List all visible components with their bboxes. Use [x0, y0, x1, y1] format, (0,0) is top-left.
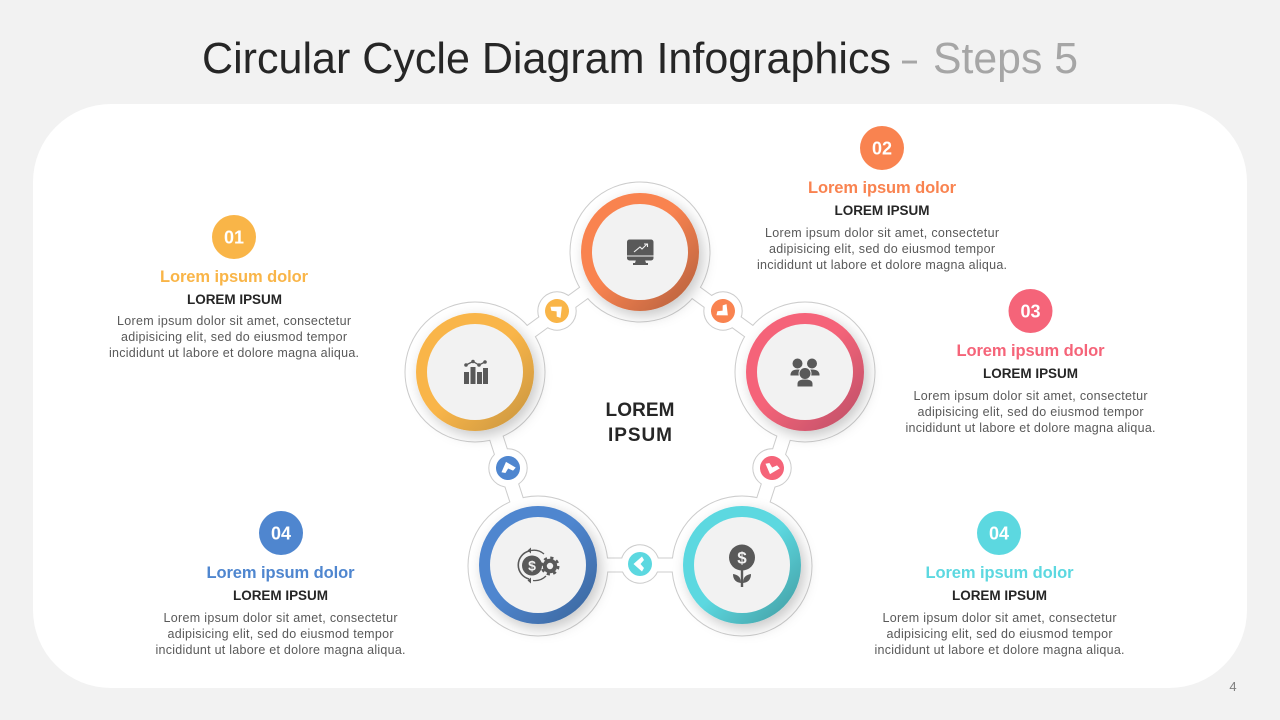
- body 04 left: incididunt ut labore et dolore magna aliqua.: [156, 643, 406, 657]
- body 01: Lorem ipsum dolor sit amet, consectetur: [117, 314, 351, 328]
- icon: monitor: [627, 240, 654, 265]
- badge 04 left: [259, 511, 303, 555]
- ring: step 3 pink: [746, 313, 864, 431]
- body 02: incididunt ut labore et dolore magna aliqua.: [757, 258, 1007, 272]
- ring: step 1 yellow: [416, 313, 534, 431]
- badge 02: 02: [872, 138, 892, 158]
- arrow: orange: [706, 294, 740, 328]
- body 02: Lorem ipsum dolor sit amet, consectetur: [765, 226, 999, 240]
- subheading 03: LOREM IPSUM: [983, 366, 1078, 381]
- text block: step 02: [757, 126, 1007, 272]
- heading 04 right: Lorem ipsum dolor: [926, 564, 1074, 582]
- icon: money plant: $: [737, 548, 747, 568]
- heading 03: Lorem ipsum dolor: [956, 342, 1105, 360]
- text block: step 04 right: [874, 511, 1124, 657]
- icon: money plant: [729, 544, 755, 587]
- body 03: Lorem ipsum dolor sit amet, consectetur: [914, 389, 1148, 403]
- title: Circular Cycle Diagram Infographics: [202, 34, 891, 83]
- panel: main white card: [33, 104, 1247, 688]
- subheading 01: LOREM IPSUM: [187, 292, 282, 307]
- arrow: pink: [757, 453, 787, 483]
- heading 04 left: Lorem ipsum dolor: [206, 564, 355, 582]
- center label: LOREM: [606, 400, 674, 421]
- body 04 left: adipisicing elit, sed do eiusmod tempor: [168, 627, 394, 641]
- icon: bar chart: [464, 360, 488, 384]
- body 04 right: incididunt ut labore et dolore magna aliqua.: [874, 643, 1124, 657]
- icon: people: [790, 358, 820, 386]
- title: Steps 5: [933, 34, 1078, 83]
- text block: step 03: [906, 289, 1156, 435]
- body 02: adipisicing elit, sed do eiusmod tempor: [769, 242, 995, 256]
- badge 04 left: 04: [271, 524, 291, 544]
- icon: dollar and gear: $: [528, 558, 536, 574]
- body 03: incididunt ut labore et dolore magna aliqua.: [906, 421, 1156, 435]
- badge 03: [1008, 289, 1052, 333]
- body 04 left: [156, 611, 406, 657]
- body 04 right: Lorem ipsum dolor sit amet, consectetur: [882, 611, 1116, 625]
- center label: IPSUM: [608, 425, 672, 446]
- body 01: adipisicing elit, sed do eiusmod tempor: [121, 330, 347, 344]
- arrow: blue: [493, 453, 523, 483]
- arrow: yellow: [540, 294, 574, 328]
- cycle outline frame: [406, 182, 874, 636]
- body 01: incididunt ut labore et dolore magna aliqua.: [109, 346, 359, 360]
- body 04 left: Lorem ipsum dolor sit amet, consectetur: [164, 611, 398, 625]
- ring: step 5 blue: [479, 506, 597, 624]
- page number: 4: [1229, 679, 1237, 694]
- title: –: [902, 34, 917, 83]
- center label: [606, 400, 674, 446]
- badge 01: 01: [224, 228, 244, 248]
- subheading 04 right: LOREM IPSUM: [952, 588, 1047, 603]
- badge 04 right: [977, 511, 1021, 555]
- text block: step 01: [109, 215, 359, 360]
- body 02: [757, 226, 1007, 272]
- body 04 right: adipisicing elit, sed do eiusmod tempor: [886, 627, 1112, 641]
- ring: step 2 orange: [581, 193, 699, 311]
- subheading 02: LOREM IPSUM: [834, 203, 930, 218]
- badge 02: [860, 126, 904, 170]
- body 01: [109, 314, 359, 360]
- text block: step 04 left: [156, 511, 406, 657]
- arrow: cyan: [628, 552, 652, 576]
- body 03: adipisicing elit, sed do eiusmod tempor: [918, 405, 1144, 419]
- badge 01: [212, 215, 256, 259]
- ring: step 4 cyan: [683, 506, 801, 624]
- subheading 04 left: LOREM IPSUM: [233, 588, 328, 603]
- heading 01: Lorem ipsum dolor: [160, 268, 309, 286]
- badge 04 right: 04: [989, 524, 1009, 544]
- icon: dollar and gear: [518, 548, 558, 584]
- body 04 right: [874, 611, 1124, 657]
- heading 02: Lorem ipsum dolor: [808, 179, 957, 197]
- body 03: [906, 389, 1156, 435]
- badge 03: 03: [1020, 302, 1041, 322]
